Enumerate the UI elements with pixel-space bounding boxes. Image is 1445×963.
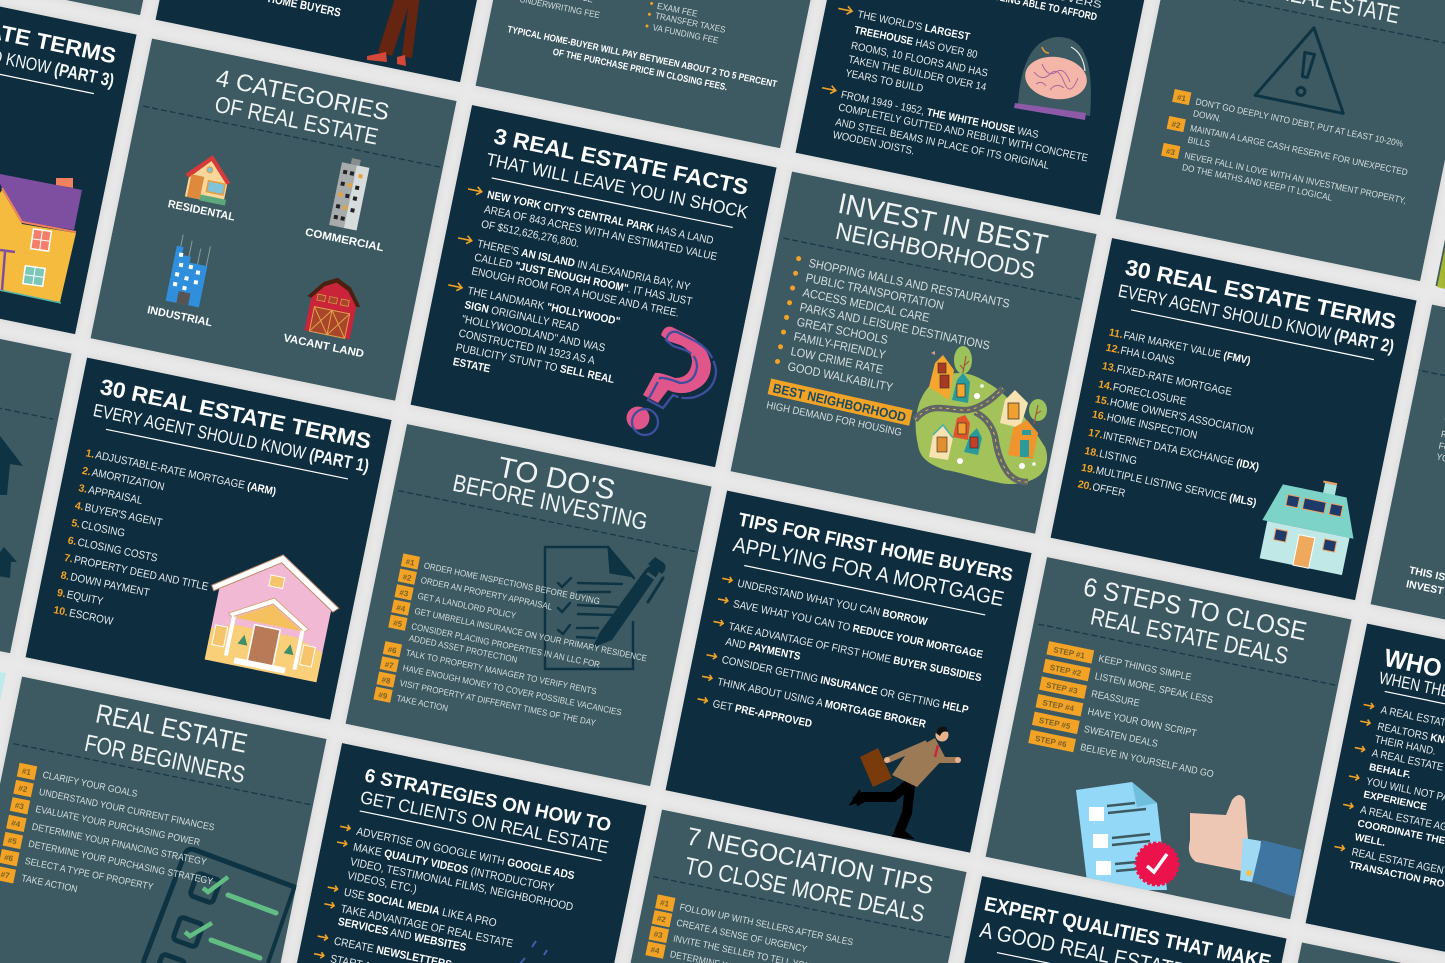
text: facts body (448, 186, 718, 383)
heading: TO DO'S (495, 452, 618, 507)
label: vacant land: VACANT LAND (282, 332, 365, 360)
list: terms 11-20: 14. (1097, 378, 1114, 393)
heading: EVERY AGENT SHOULD KNOW (PART 1) (92, 400, 371, 476)
list: to do items: #7 (384, 660, 395, 671)
list: steps: HAVE YOUR OWN SCRIPT (1087, 705, 1198, 739)
list: warning tips: MAINTAIN A LARGE CASH RESERVE FOR UNEXPECTED (1189, 123, 1409, 178)
heading: NEIGHBORHOODS (833, 218, 1037, 285)
text: facts body: ROOMS, 10 FLOORS AND HAS (850, 40, 989, 80)
panel: partial teal card with house arrows (0, 291, 72, 653)
list: warning tips (1161, 89, 1408, 205)
list: closing fee items: VA FUNDING FEE (652, 22, 720, 46)
list: terms 1-10: 6. (67, 535, 78, 548)
heading: 6 STRATEGIES ON HOW TO (363, 765, 613, 837)
illustration: neighborhood map (915, 346, 1047, 484)
list: warning tips: #1 (1176, 93, 1187, 103)
list: beginner steps: #7 (0, 870, 11, 881)
list: agent points: WELL. (1354, 832, 1387, 849)
list: strategies: VIDEO, TESTIMONIAL FILMS, NEIGHBORHOOD (349, 856, 575, 914)
panel: 4 categories of real estate (90, 38, 457, 401)
panel: invest in best neighborhoods (730, 172, 1098, 534)
list: terms 11-20: FORECLOSURE (1112, 382, 1187, 408)
text: facts body: ENOUGH ROOM FOR A HOUSE AND A TREE. (470, 265, 680, 320)
list: mortgage tips: GET PRE-APPROVED (712, 699, 813, 730)
heading: REAL ESTATE (93, 698, 250, 759)
heading: 4 CATEGORIES (214, 65, 392, 126)
panel: who needs an agent (partial) (1305, 624, 1445, 963)
list: warning tips: DON'T GO DEEPLY INTO DEBT, PUT AT LEAST 10-20% (1195, 96, 1404, 149)
list: to do items: GET A LANDLORD POLICY (417, 590, 517, 621)
heading: EVERY AGENT SHOULD KNOW (PART 2) (1117, 281, 1396, 357)
list: agent points: THEIR HAND. (1374, 734, 1437, 758)
list: terms 1-10: 7. (63, 552, 74, 565)
list: terms 11-20: 18. (1083, 445, 1100, 460)
list: mortgage tips: TAKE ADVANTAGE OF FIRST HOME BUYER SUBSIDIES (727, 621, 983, 685)
icon: commercial tower (329, 156, 371, 231)
heading (216, 70, 388, 144)
list: terms 1-10: 2. (81, 465, 92, 478)
list: strategies: USE SOCIAL MEDIA LIKE A PRO (343, 886, 498, 930)
list: warning tips: DOWN. (1192, 108, 1222, 124)
panel: warning tips card (partial) (1115, 0, 1445, 281)
list: terms 1-10: DOWN PAYMENT (69, 572, 151, 600)
list: terms 1-10: APPRAISAL (87, 485, 143, 507)
list: steps: STEP #6 (1034, 734, 1068, 749)
list: to do items: GET UMBRELLA INSURANCE ON YOUR PRIMARY RESIDENCE (414, 606, 648, 664)
panel: partial card with green illustration edge (1429, 0, 1445, 351)
list: to do items: #6 (387, 645, 398, 656)
list: beginner steps: TAKE ACTION (20, 873, 78, 894)
list: to do items: #2 (402, 572, 413, 583)
panel: 30 terms part 2 (1050, 238, 1417, 600)
icon: warning triangle (1254, 26, 1345, 115)
panel: partial teal card right (1366, 303, 1445, 667)
text: facts body: FROM 1949 - 1952, THE WHITE HOUSE WAS (840, 89, 1040, 141)
list: terms 11-20: FHA LOANS (1119, 345, 1176, 368)
text: facts body: TAKEN THE BUILDER OVER 14 (847, 54, 987, 94)
list: closing fee items: EXAM FEE (656, 0, 699, 19)
icon: residential house (185, 155, 230, 206)
list: beginner steps: #2 (18, 784, 29, 794)
heading: REAL ESTATE DEALS (1088, 603, 1291, 670)
list: terms 1-10: 1. (85, 447, 96, 461)
list: terms 11-20: OFFER (1091, 482, 1126, 500)
text: facts body: AND STEEL BEAMS IN PLACE OF ITS ORIGINAL (834, 117, 1050, 172)
heading: BEFORE INVESTING (450, 470, 650, 536)
heading (82, 697, 254, 789)
list: strategies: MAKE QUALITY VIDEOS (INTRODUCTORY (352, 841, 555, 895)
text: facts body: CONSTRUCTED IN 1923 AS A (458, 327, 597, 368)
list: mortgage tips: CONSIDER GETTING INSURANCE OR GETTING HELP (721, 655, 969, 717)
panel: partial teal card bottom right (1240, 942, 1445, 963)
panel: tips for first home buyers (664, 490, 1032, 862)
list: terms 11-20: FAIR MARKET VALUE (FMV) (1122, 330, 1251, 367)
list: agent points (1330, 701, 1445, 896)
list: to do items: HAVE ENOUGH MONEY TO COVER POSSIBLE VACANCIES (402, 662, 623, 718)
text: facts body: THE WORLD'S LARGEST (856, 9, 972, 44)
list: negotiation tips: CREATE A SENSE OF URGENCY (676, 917, 808, 955)
list: to do items: CONSIDER PLACING PROPERTIES IN AN LLC FOR (410, 621, 601, 670)
callout: best neighborhood banner: BEST NEIGHBORHOOD (771, 380, 907, 425)
text: facts body: "HOLLYWOODLAND" AND WAS (460, 313, 606, 355)
text: facts body: COMPLETELY GUTTED AND REBUILT WITH CONCRETE (837, 102, 1089, 165)
text: partial body (1435, 417, 1445, 466)
list: beginner steps: #4 (10, 818, 22, 829)
list: beginner steps: #3 (14, 801, 25, 812)
list: to do items: ORDER HOME INSPECTIONS BEFORE BUYING (423, 560, 601, 606)
text: facts body (822, 0, 1101, 169)
list: warning tips: BILLS (1187, 134, 1211, 149)
label: residential: RESIDENTAL (167, 198, 236, 224)
list: to do items: #8 (381, 675, 392, 686)
list: to do items: #5 (392, 618, 403, 629)
illustration: checklist, badge and thumbs up (1076, 782, 1302, 897)
list: to do items: TALK TO PROPERTY MANAGER TO VERIFY RENTS (405, 647, 598, 697)
list: neighborhood features: FAMILY-FRIENDLY (792, 331, 887, 362)
list: terms 1-10: 8. (59, 569, 71, 583)
list: terms 11-20: 19. (1080, 462, 1097, 476)
list: strategies: ADVERTISE ON GOOGLE WITH GOOGLE ADS (355, 825, 576, 882)
panel: 3 real estate facts (410, 105, 777, 467)
list: neighborhood features: GOOD WALKABILITY (786, 361, 894, 395)
panel: 6 strategies on how to get clients (280, 743, 647, 963)
heading: 6 STEPS TO CLOSE (1081, 571, 1309, 646)
list: terms 11-20: 16. (1091, 408, 1108, 423)
list: closing fee items (519, 0, 729, 47)
list: to do items: #1 (405, 557, 416, 568)
list: beginner steps: DETERMINE YOUR FINANCING STRATEGY (31, 821, 207, 867)
list: negotiation tips (645, 894, 855, 963)
list: steps: STEP #4 (1042, 698, 1075, 714)
list: terms 1-10: ADJUSTABLE-RATE MORTGAGE (ARM) (94, 450, 277, 498)
list: to do items: #3 (399, 588, 410, 599)
list: terms 1-10: 4. (74, 500, 85, 513)
list: negotiation tips: #4 (650, 945, 661, 956)
panel: to do's before investing (345, 424, 712, 786)
list: terms 11-20: 15. (1094, 393, 1111, 408)
list: terms 1-10: 9. (56, 587, 67, 600)
panel: closing fees card (partial) (475, 0, 842, 148)
label: industrial: INDUSTRIAL (146, 304, 213, 329)
text: facts body: NEW YORK CITY'S CENTRAL PARK HAS A LAND (486, 189, 715, 247)
label: commercial: COMMERCIAL (304, 226, 385, 254)
list: beginner steps: EVALUATE YOUR PURCHASING POWER (35, 804, 201, 848)
list: terms 11-20: HOME INSPECTION (1106, 412, 1198, 442)
list: negotiation tips: #3 (653, 929, 664, 940)
text: facts body: PUBLICITY STUNT TO SELL REAL (455, 341, 616, 386)
list: terms 11-20: 17. (1087, 427, 1104, 441)
heading: TIPS FOR FIRST HOME BUYERS (736, 510, 1015, 586)
list: beginner steps: SELECT A TYPE OF PROPERTY (24, 856, 154, 892)
list: beginner steps: #6 (3, 853, 14, 863)
panel: 6 steps to close real estate deals (981, 557, 1359, 942)
heading: OF REAL ESTATE (213, 91, 380, 150)
list: steps: LISTEN MORE, SPEAK LESS (1094, 670, 1214, 705)
icon: house arrows (0, 430, 23, 578)
list: to do items: VISIT PROPERTY AT DIFFERENT TIMES OF THE DAY (399, 678, 597, 728)
list: warning tips: #3 (1165, 147, 1176, 157)
heading: APPLYING FOR A MORTGAGE (731, 533, 1006, 611)
panel: treehouse facts card (partial) (795, 0, 1162, 215)
list: steps: STEP #2 (1049, 663, 1083, 678)
list: terms 11-20: 12. (1105, 342, 1121, 356)
heading (450, 443, 655, 536)
text: facts body: YEARS TO BUILD (844, 68, 924, 95)
illustration: teal house (1255, 470, 1364, 576)
heading: 30 REAL ESTATE TERMS (1123, 255, 1398, 335)
list: neighborhood features (775, 256, 1010, 391)
list: mortgage tips: THINK ABOUT USING A MORTGAGE BROKER (716, 677, 927, 731)
heading (1377, 644, 1445, 742)
heading: TO CLOSE MORE DEALS (682, 853, 927, 928)
list: terms 11-20: LISTING (1098, 449, 1138, 468)
list: terms 11-20: 11. (1108, 326, 1124, 341)
icon: document and pen (545, 547, 666, 669)
illustration: checklist (143, 849, 300, 963)
heading: 7 NEGOCIATION TIPS (684, 822, 936, 900)
text: facts body: AREA OF 843 ACRES WITH AN ESTIMATED VALUE (483, 203, 718, 263)
list: neighborhood features: GREAT SCHOOLS (795, 316, 889, 347)
list: neighborhood features: PARKS AND LEISURE DESTINATIONS (799, 302, 991, 353)
heading: THAT WILL LEAVE YOU IN SHOCK (484, 149, 750, 222)
list: warning tips: #2 (1171, 120, 1182, 130)
text: facts body: SIGN ORIGINALLY READ (463, 299, 581, 335)
text: facts body: TREEHOUSE HAS OVER 80 (853, 25, 979, 61)
panel: real estate for beginners (0, 676, 349, 963)
heading: INVEST IN BEST (835, 188, 1051, 262)
list: mortgage tips: UNDERSTAND WHAT YOU CAN BORROW (736, 578, 929, 629)
list: terms 1-10: 5. (70, 517, 81, 531)
panel: partial card bottom left sliver (0, 672, 6, 702)
list: strategies: VIDEOS, ETC.) (346, 869, 418, 896)
list: negotiation tips: #1 (659, 898, 670, 909)
list: strategies: TAKE ADVANTAGE OF REAL ESTATE (339, 903, 514, 950)
illustration: running businessman (851, 727, 961, 838)
text: facts body: ESTATE (452, 356, 491, 376)
list: steps: STEP #5 (1038, 716, 1072, 731)
list: terms 1-10: BUYER'S AGENT (84, 502, 164, 530)
list: to do items: TAKE ACTION (396, 693, 449, 714)
panel: home buyers card (partial) (156, 0, 477, 82)
panel: 30 terms part 1 (25, 358, 392, 720)
list: beginner steps: DETERMINE YOUR PURCHASING STRATEGY (27, 838, 214, 887)
list: beginner steps: CLARIFY YOUR GOALS (42, 769, 138, 799)
icon: industrial building (166, 234, 213, 307)
list: terms 1-10: CLOSING COSTS (76, 537, 158, 565)
list: agent points: EXPERIENCE (1362, 789, 1428, 813)
panel: 30 terms part 3 (0, 0, 137, 334)
illustration: man's legs (367, 0, 420, 66)
list: steps: REASSURE (1090, 687, 1141, 709)
list: terms 1-10: 3. (77, 482, 88, 496)
text: facts body: THE LANDMARK "HOLLYWOOD" (466, 285, 621, 328)
list: mortgage tips (696, 575, 991, 762)
list: steps: KEEP THINGS SIMPLE (1098, 652, 1193, 682)
text: closing fees note: OF THE PURCHASE PRICE IN CLOSING FEES. (552, 47, 728, 93)
icon: pink question mark (626, 327, 716, 435)
panel: partial teal card top left (66, 0, 144, 16)
list: neighborhood features: PUBLIC TRANSPORTATION (805, 272, 945, 313)
list: terms 1-10: PROPERTY DEED AND TITLE (73, 555, 209, 593)
text: partial note: INVEST (1405, 578, 1445, 598)
panel: expert qualities (920, 876, 1287, 963)
icon: red barn (304, 278, 360, 340)
list: terms 1-10: EQUITY (66, 589, 104, 608)
list: mortgage tips: AND PAYMENTS (724, 636, 801, 663)
list: strategies (312, 822, 581, 963)
list: warning tips: DO THE MATHS AND KEEP IT LOGICAL (1181, 162, 1333, 203)
list: terms 11-20: 13. (1101, 360, 1118, 375)
heading: FOR BEGINNERS (82, 730, 247, 789)
list: neighborhood features: SHOPPING MALLS AND RESTAURANTS (808, 257, 1011, 311)
heading: 30 REAL ESTATE TERMS (98, 374, 373, 454)
text: closing fees note: TYPICAL HOME-BUYER WILL PAY BETWEEN ABOUT 2 TO 5 PERCENT (506, 24, 778, 90)
list: beginner steps: #1 (21, 767, 32, 777)
list: terms 11-20: HOME OWNER'S ASSOCIATION (1109, 397, 1255, 438)
list: steps (1028, 641, 1233, 781)
list: steps: STEP #3 (1045, 681, 1079, 696)
illustration: yellow house (0, 173, 82, 303)
list: neighborhood features: ACCESS MEDICAL CARE (802, 287, 931, 325)
list: steps: STEP #1 (1053, 645, 1086, 661)
text: facts body: WOODEN JOISTS. (832, 130, 915, 158)
text: partial note (1405, 564, 1445, 598)
heading: 3 REAL ESTATE FACTS (492, 123, 751, 200)
list: to do items: #4 (395, 603, 407, 614)
panel: 7 negociation tips (600, 810, 967, 963)
list: beginner steps (0, 763, 228, 923)
list: terms 11-20: FIXED-RATE MORTGAGE (1116, 364, 1233, 399)
list: terms 1-10: 10. (52, 604, 69, 619)
text: facts body: OF $512,626,276,800. (480, 218, 580, 250)
text: facts body: CALLED "JUST ENOUGH ROOM". IT HAS JUST (473, 251, 694, 308)
list: terms 1-10: ESCROW (68, 608, 114, 628)
list: negotiation tips: FOLLOW UP WITH SELLERS AFTER SALES (679, 902, 854, 948)
icon: decorative blue marks (518, 941, 547, 963)
list: terms 11-20: 20. (1077, 478, 1093, 493)
list: terms 1-10: CLOSING (80, 520, 126, 540)
list: to do items: #9 (378, 690, 389, 701)
text: high demand: HIGH DEMAND FOR HOUSING (765, 399, 903, 439)
list: terms 11-20: MULTIPLE LISTING SERVICE (MLS) (1095, 465, 1257, 509)
list: negotiation tips: #2 (656, 914, 667, 925)
list: warning tips: NEVER FALL IN LOVE WITH AN INVESTMENT PROPERTY, (1184, 150, 1407, 206)
list: terms 1-10 (52, 447, 277, 655)
list: terms 11-20 (1078, 328, 1258, 508)
list: to do items: ADDED ASSET PROTECTION (408, 632, 518, 665)
list: closing fee items: TRANSFER TAXES (654, 10, 727, 35)
heading: GET CLIENTS ON REAL ESTATE (359, 787, 610, 857)
text: facts body: THERE'S AN ISLAND IN ALEXANDRIA BAY, NY (476, 238, 691, 294)
list: terms 1-10: AMORTIZATION (91, 467, 165, 494)
list: agent points: BEHALF. (1368, 762, 1412, 781)
list: mortgage tips: SAVE WHAT YOU CAN TO REDUCE YOUR MORTGAGE (732, 599, 984, 661)
illustration: pink watercolor house (197, 542, 347, 684)
list: terms 11-20: INTERNET DATA EXCHANGE (IDX) (1102, 430, 1260, 474)
list: beginner steps: UNDERSTAND YOUR CURRENT FINANCES (38, 787, 215, 833)
list: steps: BELIEVE IN YOURSELF AND GO (1079, 741, 1215, 779)
illustration: brain in glass dome (1014, 37, 1091, 120)
list: steps: SWEATEN DEALS (1083, 723, 1159, 749)
list: strategies: SERVICES AND WEBSITES (337, 916, 467, 954)
list: to do items: ORDER AN PROPERTY APPRAISAL (420, 575, 553, 612)
list: to do items (373, 553, 658, 752)
list: beginner steps: #5 (7, 836, 18, 846)
list: neighborhood features: LOW CRIME RATE (789, 346, 884, 377)
